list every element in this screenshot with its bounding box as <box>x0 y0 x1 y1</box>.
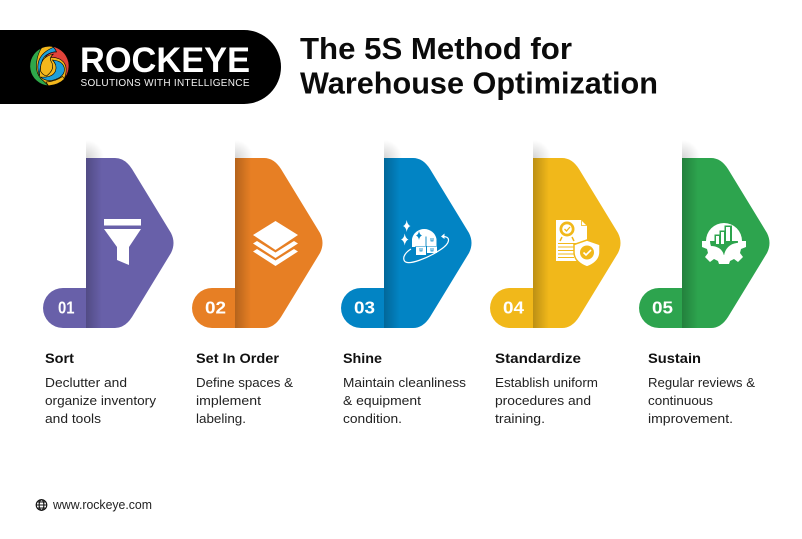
text block: set in order: Set In Order <box>196 350 280 366</box>
text block: shine: & equipment <box>343 393 421 408</box>
text block: sort: Sort <box>45 350 74 366</box>
text block: standardize: Establish uniform <box>495 375 598 390</box>
text block: sustain: continuous <box>648 393 714 408</box>
footer website <box>36 497 152 512</box>
icon: swirl logo <box>30 46 69 86</box>
number 03: 03 <box>354 298 375 318</box>
number 02: 02 <box>205 298 226 318</box>
step 3: shine <box>341 140 472 328</box>
text block: shine: Shine <box>343 350 382 366</box>
text block: standardize: Standardize <box>495 350 581 366</box>
text block: set in order: implement <box>196 393 261 408</box>
step 4: standardize <box>490 140 620 328</box>
text block: set in order: labeling. <box>196 411 246 426</box>
text block: sort <box>45 350 157 426</box>
text block: sustain: Regular reviews & <box>648 375 755 390</box>
icon: funnel <box>104 219 141 265</box>
text block: set in order: Define spaces & <box>196 375 293 390</box>
icon: globe <box>36 500 47 510</box>
logo banner <box>0 30 281 104</box>
icon: gear with globe and leaves <box>702 223 746 264</box>
text block: sustain: improvement. <box>648 411 733 426</box>
text block: shine: condition. <box>343 411 402 426</box>
text block: sort: Declutter and <box>45 375 127 390</box>
step 2: set in order <box>192 140 322 328</box>
number 01: 01 <box>58 298 75 318</box>
icon: document with shield <box>556 220 600 267</box>
text block: shine <box>343 350 467 426</box>
website url: www.rockeye.com <box>52 497 152 512</box>
brand name: ROCKEYE <box>80 41 250 80</box>
text block: standardize: procedures and <box>495 393 591 408</box>
number 04: 04 <box>503 298 524 318</box>
text block: sort: organize inventory <box>45 393 157 408</box>
title <box>300 31 658 100</box>
icon: warehouse with sparkles and orbit <box>401 220 449 263</box>
text block: standardize <box>495 350 598 426</box>
title: Warehouse Optimization <box>300 66 658 100</box>
text block: sustain: Sustain <box>648 350 701 366</box>
title: The 5S Method for <box>300 31 572 66</box>
number 05: 05 <box>652 298 673 318</box>
step 1: sort <box>43 140 174 328</box>
text block: sustain <box>648 350 755 426</box>
icon: layers <box>253 221 298 266</box>
text block: standardize: training. <box>495 411 545 426</box>
text block: shine: Maintain cleanliness <box>343 375 467 390</box>
text block: sort: and tools <box>45 411 102 426</box>
text block: set in order <box>196 350 293 426</box>
tagline: SOLUTIONS WITH INTELLIGENCE <box>80 78 250 89</box>
step 5: sustain <box>639 140 770 328</box>
